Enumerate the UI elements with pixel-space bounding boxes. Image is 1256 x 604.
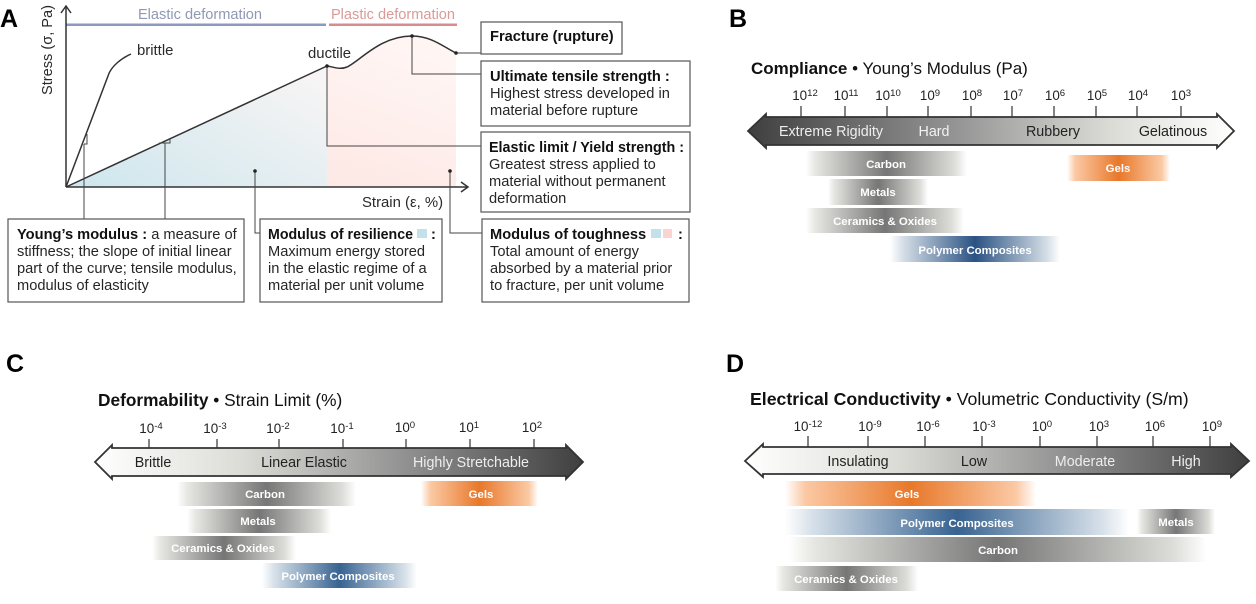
scale arrow B — [748, 114, 1234, 148]
tick labels C: 10 — [522, 420, 537, 435]
tick labels B: 8 — [977, 88, 982, 99]
bar: ceramics and oxides — [152, 536, 296, 560]
tick labels C: -4 — [154, 421, 163, 432]
tick labels D: 10 — [1145, 419, 1160, 434]
box: modulus of resilience: Modulus of resilience — [268, 227, 413, 243]
panel D: electrical conductivity scale — [726, 350, 1249, 591]
box: ultimate tensile strength: Ultimate tensile strength : — [490, 69, 670, 85]
bar: carbon: Carbon — [245, 489, 285, 501]
tick labels B: 4 — [1143, 88, 1149, 99]
tick labels B: 10 — [1128, 88, 1143, 103]
box: elastic limit: Greatest stress applied to — [489, 157, 656, 173]
tick labels D: -12 — [809, 419, 822, 430]
scale labels B — [779, 124, 1207, 140]
slope triangles — [84, 134, 170, 144]
brittle curve — [66, 43, 173, 187]
bar: metals — [1137, 509, 1215, 534]
tick labels C: 10 — [459, 420, 474, 435]
panel C: deformability scale — [6, 350, 583, 588]
bar: gels — [1067, 155, 1170, 181]
box: young's modulus: part of the curve; tensile modulus, — [17, 261, 237, 277]
box: elastic limit: material without permanent — [489, 174, 666, 190]
axes — [61, 6, 468, 192]
scale labels D: High — [1171, 454, 1201, 470]
bar: polymer composites: Polymer Composites — [918, 245, 1032, 257]
tick labels B: 10 — [834, 88, 848, 103]
box: young's modulus: Young’s modulus : a measure of — [17, 227, 238, 243]
scale labels B: Rubbery — [1026, 124, 1081, 140]
box: modulus of toughness: absorbed by a material prior — [490, 261, 672, 277]
title C: Deformability • Strain Limit (%) — [98, 390, 342, 410]
scale labels D: Low — [961, 454, 988, 470]
tick labels C: 10 — [330, 421, 345, 436]
box: modulus of resilience: material per unit volume — [268, 278, 424, 294]
tick labels C: 10 — [139, 421, 154, 436]
bar: gels — [421, 481, 538, 506]
scale labels C: Highly Stretchable — [413, 455, 529, 471]
bar: ceramics and oxides: Ceramics & Oxides — [794, 574, 898, 586]
box: elastic limit: deformation — [489, 191, 566, 207]
box: modulus of toughness: Modulus of toughness — [490, 227, 646, 243]
tick labels C: 1 — [474, 420, 479, 431]
tick labels D: -6 — [931, 419, 940, 430]
tick labels C: 2 — [537, 420, 542, 431]
scale arrow C — [95, 445, 583, 479]
shaded area: plastic region — [327, 36, 456, 187]
connector lines — [84, 34, 482, 233]
tick labels B: 12 — [807, 88, 818, 99]
ticks D — [808, 436, 1210, 447]
tick labels C — [139, 420, 542, 436]
box: modulus of toughness: Total amount of energy — [490, 244, 640, 260]
bar: ceramics and oxides — [775, 566, 918, 591]
box: ultimate tensile strength: material before rupture — [490, 103, 638, 119]
ticks B — [801, 106, 1181, 117]
tick labels B: 10 — [1045, 88, 1060, 103]
bar: gels: Gels — [1106, 163, 1130, 175]
tick labels B: 10 — [1003, 88, 1018, 103]
bar: metals: Metals — [1158, 517, 1194, 529]
tick labels B: 11 — [848, 88, 858, 99]
bar: carbon: Carbon — [978, 545, 1018, 557]
panel letter C: C — [6, 350, 24, 378]
scale labels C — [135, 455, 529, 471]
tick labels C: -2 — [281, 421, 290, 432]
tick labels D: 10 — [1202, 419, 1217, 434]
box: elastic limit — [481, 132, 690, 212]
bar: carbon — [789, 537, 1206, 562]
tick labels C: 10 — [395, 420, 410, 435]
scale labels D — [827, 454, 1201, 470]
bar: ceramics and oxides — [806, 208, 964, 233]
box: ultimate tensile strength: Highest stress developed in — [490, 86, 670, 102]
box: modulus of resilience — [260, 219, 442, 302]
tick labels D: -9 — [873, 419, 882, 430]
panel letter A: A — [0, 5, 18, 33]
brittle curve: brittle — [137, 43, 173, 59]
tick labels C: 10 — [266, 421, 281, 436]
scale labels D: Insulating — [827, 454, 889, 470]
heading: elastic deformation: Elastic deformation — [138, 7, 262, 23]
bar: gels: Gels — [895, 489, 919, 501]
scale labels B: Gelatinous — [1139, 124, 1207, 140]
box: modulus of resilience: Maximum energy stored — [268, 244, 425, 260]
box: modulus of toughness — [482, 219, 689, 302]
title D: Electrical Conductivity • Volumetric Conductivity (S/m) — [750, 389, 1189, 409]
box: young's modulus: stiffness; the slope of initial linear — [17, 244, 232, 260]
tick labels C: -3 — [218, 421, 227, 432]
shaded area: modulus of resilience — [66, 66, 327, 187]
tick labels B: 10 — [962, 88, 977, 103]
panel letter D: D — [726, 350, 744, 378]
box: young's modulus: modulus of elasticity — [17, 278, 150, 294]
tick labels B: 5 — [1102, 88, 1107, 99]
panel B: compliance scale — [729, 5, 1234, 262]
bar: polymer composites — [262, 563, 417, 588]
x axis label: Strain (ε, %) — [362, 195, 443, 211]
tick labels B — [792, 88, 1191, 103]
bar: polymer composites: Polymer Composites — [900, 518, 1014, 530]
tick labels B: 10 — [920, 88, 935, 103]
heading: plastic deformation: Plastic deformation — [331, 7, 455, 23]
scale arrow D — [745, 444, 1249, 477]
tick labels D: 10 — [1089, 419, 1104, 434]
tick labels D: 0 — [1047, 419, 1052, 430]
tick labels B: 10 — [1171, 88, 1186, 103]
panel letter B: B — [729, 5, 747, 33]
box: fracture — [481, 22, 622, 54]
scale labels B: Extreme Rigidity — [779, 124, 884, 140]
tick labels D: 10 — [858, 419, 873, 434]
tick labels B: 6 — [1060, 88, 1065, 99]
tick labels C: -1 — [345, 421, 354, 432]
bar: carbon — [177, 482, 356, 506]
tick labels B: 10 — [1087, 88, 1102, 103]
bar: metals: Metals — [240, 516, 276, 528]
bar: metals — [187, 509, 331, 533]
tick labels C: 0 — [410, 420, 415, 431]
box: ultimate tensile strength — [481, 61, 690, 126]
title B: Compliance • Young’s Modulus (Pa) — [751, 59, 1028, 78]
scale labels B: Hard — [918, 124, 950, 140]
box: young's modulus — [8, 219, 244, 302]
bar: carbon: Carbon — [866, 159, 906, 171]
tick labels C: 10 — [203, 421, 218, 436]
bar: polymer composites — [890, 236, 1060, 262]
box: modulus of toughness: : — [678, 227, 683, 243]
box: modulus of resilience: in the elastic regime of a — [268, 261, 428, 277]
tick labels B: 7 — [1018, 88, 1023, 99]
bar: metals: Metals — [860, 187, 896, 199]
bar: gels — [785, 481, 1036, 506]
tick labels D: 6 — [1160, 419, 1165, 430]
box: modulus of toughness: to fracture, per unit volume — [490, 278, 664, 294]
panel A: stress-strain curve — [0, 5, 690, 302]
tick labels D — [794, 419, 1222, 434]
scale labels C: Linear Elastic — [261, 455, 347, 471]
bar: metals — [828, 179, 928, 205]
bar: polymer composites: Polymer Composites — [281, 571, 395, 583]
ductile curve: ductile — [308, 46, 351, 62]
bar: polymer composites — [785, 509, 1129, 535]
box: modulus of resilience: : — [431, 227, 436, 243]
tick labels B: 3 — [1186, 88, 1191, 99]
scale labels D: Moderate — [1055, 454, 1115, 470]
box: elastic limit: Elastic limit / Yield strength : — [489, 140, 684, 156]
ticks C — [149, 439, 534, 449]
tick labels D: 10 — [794, 419, 809, 434]
y axis label: Stress (σ, Pa) — [40, 5, 56, 95]
tick labels B: 9 — [935, 88, 940, 99]
scale labels C: Brittle — [135, 455, 171, 471]
tick labels D: 10 — [972, 419, 987, 434]
tick labels D: 10 — [916, 419, 931, 434]
ductile curve — [66, 36, 456, 187]
tick labels D: 3 — [1104, 419, 1109, 430]
bar: ceramics and oxides: Ceramics & Oxides — [171, 543, 275, 555]
bar: carbon — [806, 151, 967, 176]
bar: ceramics and oxides: Ceramics & Oxides — [833, 216, 937, 228]
tick labels D: -3 — [987, 419, 996, 430]
box: fracture: Fracture (rupture) — [490, 29, 614, 45]
tick labels B: 10 — [792, 88, 807, 103]
tick labels B: 10 — [890, 88, 901, 99]
tick labels B: 10 — [875, 88, 890, 103]
bar: gels: Gels — [469, 489, 493, 501]
tick labels D: 10 — [1032, 419, 1047, 434]
tick labels D: 9 — [1217, 419, 1222, 430]
